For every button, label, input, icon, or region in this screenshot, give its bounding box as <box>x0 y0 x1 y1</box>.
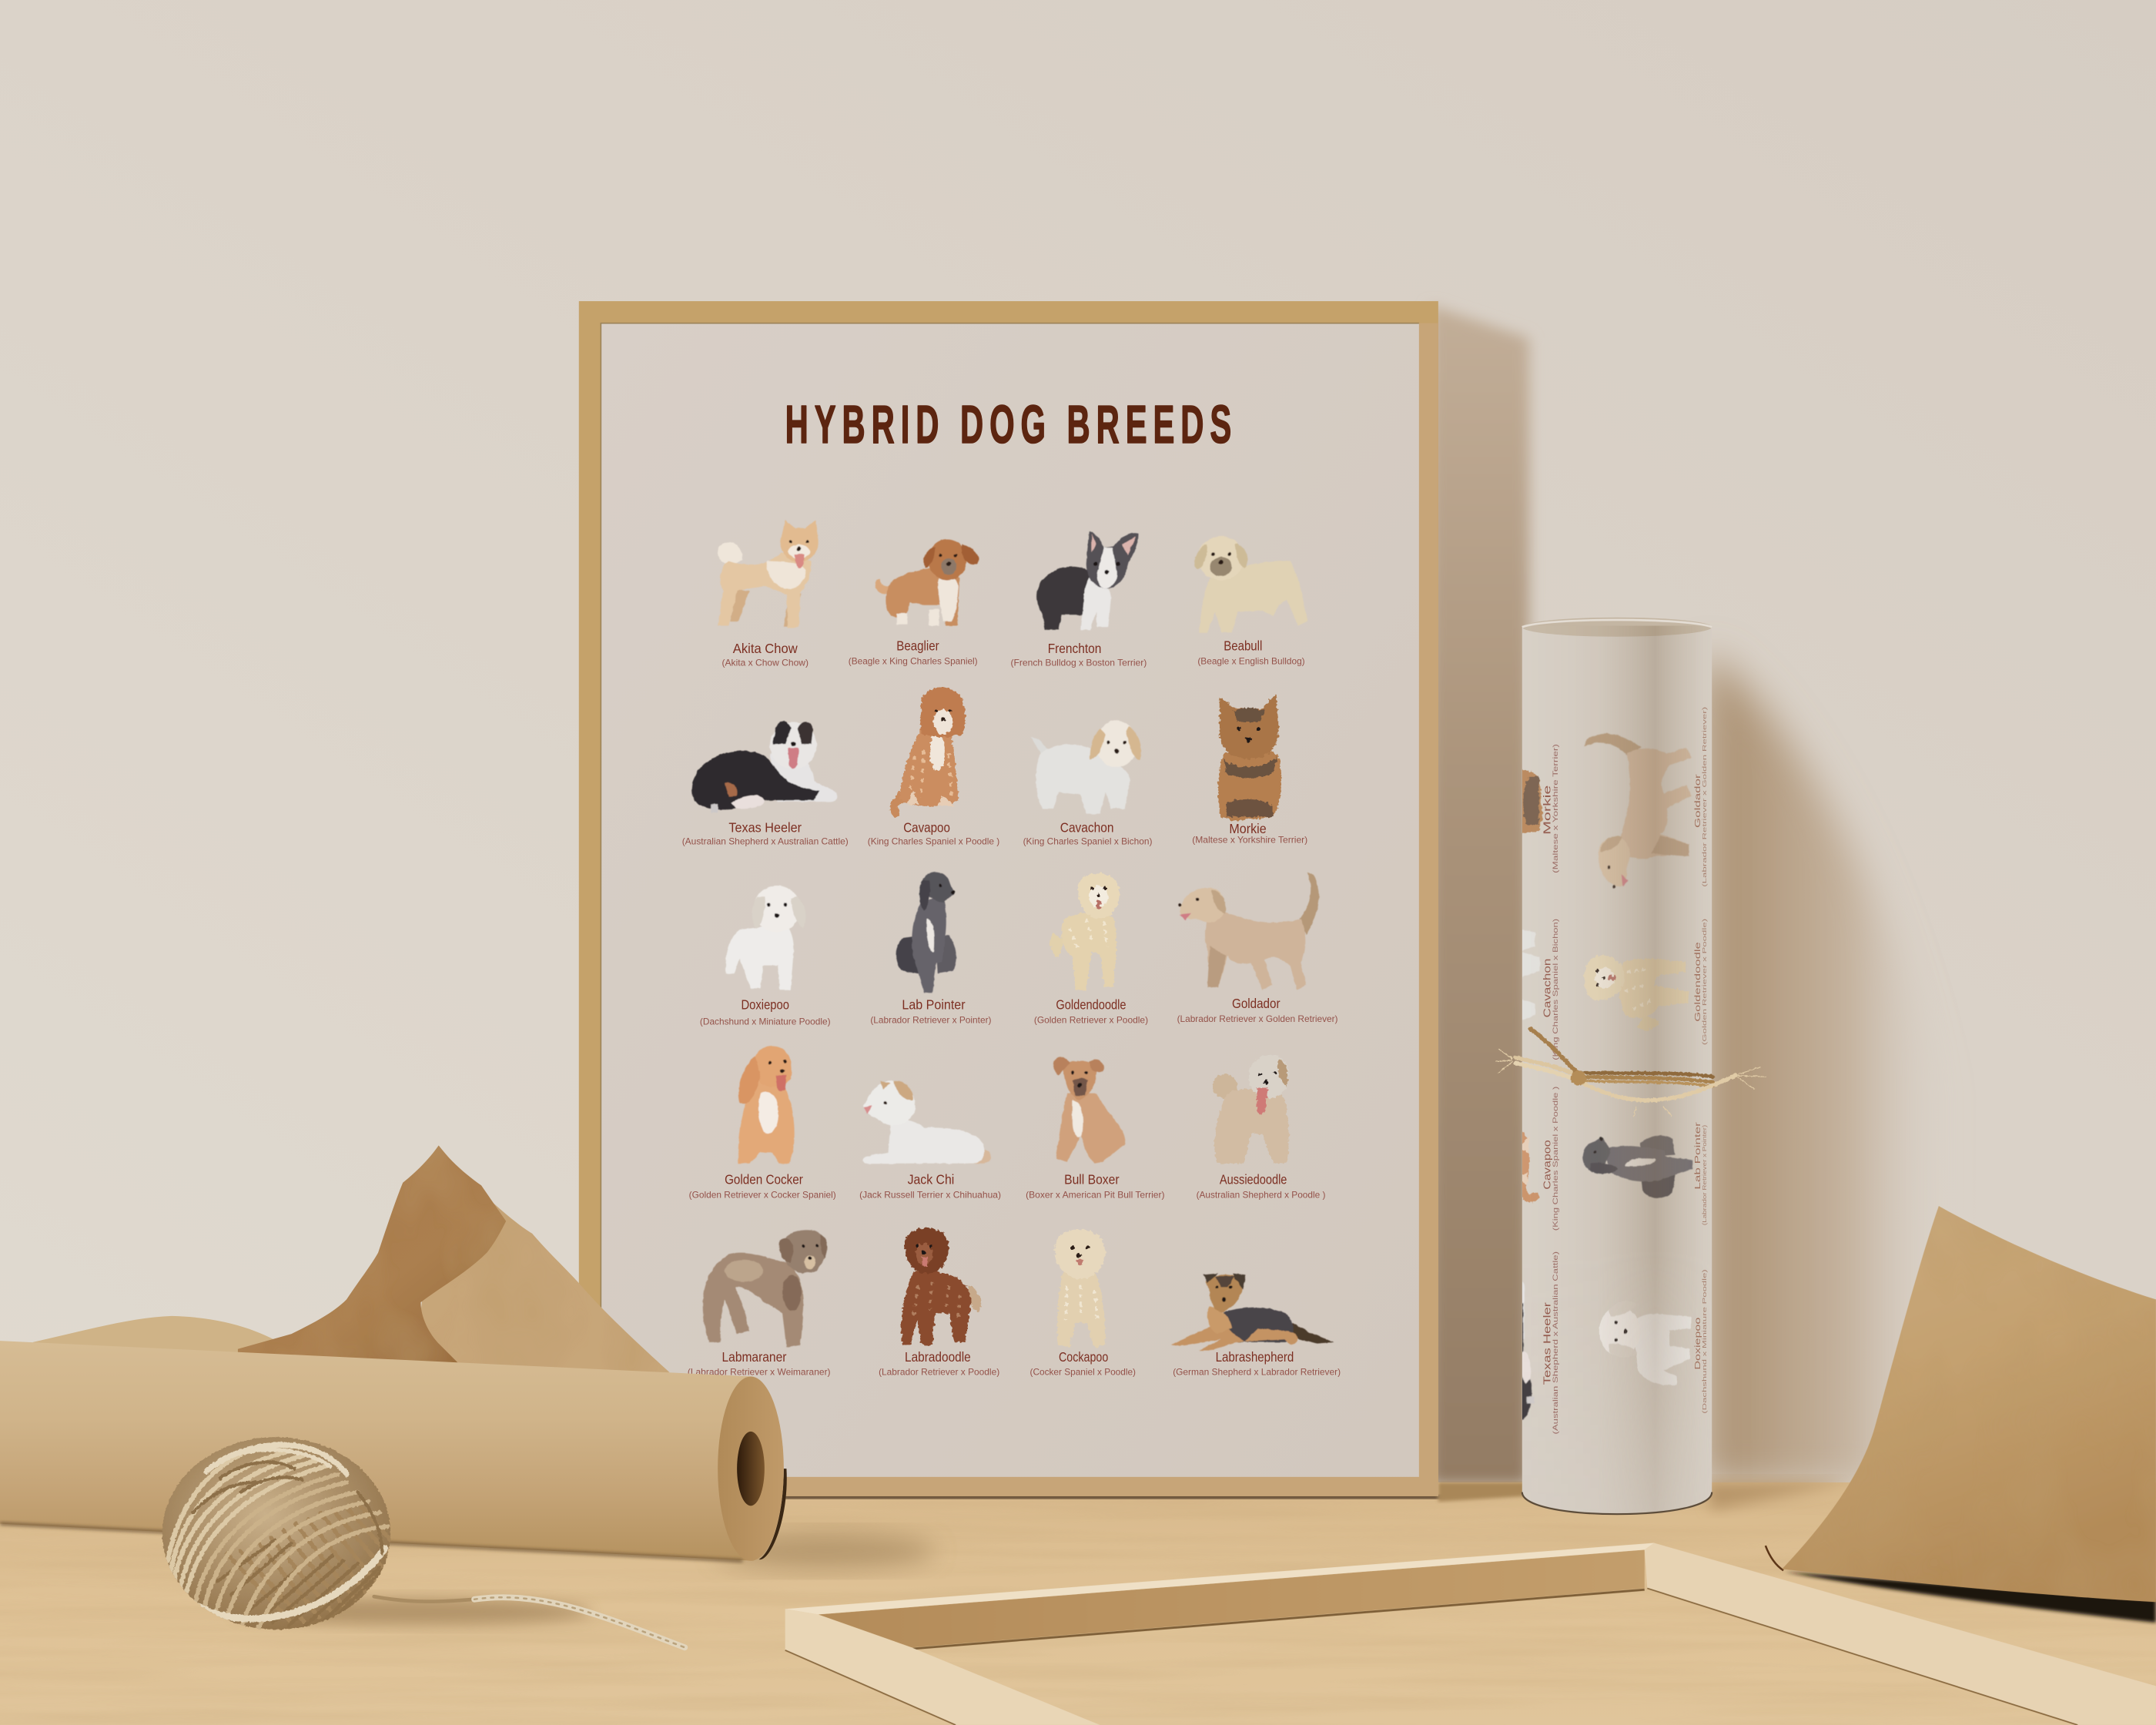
wall shadow of frame <box>1430 305 1529 1486</box>
cell: Goldendoodle <box>1034 873 1148 1026</box>
wall shadow of poster roll <box>1705 653 1946 1486</box>
paper light side <box>413 1146 670 1389</box>
cross: Labmaraner: (Labrador Retriever x Weimaraner) <box>688 1367 831 1378</box>
cell: Frenchton <box>1010 531 1147 668</box>
cross: Morkie: (Maltese x Yorkshire Terrier) <box>1192 835 1307 846</box>
frame left side <box>785 1609 1100 1725</box>
rolled labels: Lab Pointer <box>1694 1121 1702 1190</box>
dog: Labradoodle <box>901 1228 981 1345</box>
name: Golden Cocker: Golden Cocker <box>725 1171 803 1187</box>
cell: Beaglier <box>849 539 979 667</box>
name: Aussiedoodle: Aussiedoodle <box>1220 1171 1287 1187</box>
dog: Jack Chi <box>863 1080 991 1164</box>
cross: Goldendoodle: (Golden Retriever x Poodle) <box>1034 1015 1148 1026</box>
goldador rotated <box>1584 734 1692 889</box>
empty frame on table <box>785 1543 2156 1725</box>
dog: Texas Heeler <box>691 722 837 812</box>
cross: Frenchton: (French Bulldog x Boston Terrier) <box>1011 657 1147 668</box>
dog: Frenchton <box>1036 531 1139 630</box>
dog: Morkie <box>1218 695 1281 821</box>
paper inner edge <box>601 323 1419 1477</box>
cell: Labrashepherd <box>1171 1274 1341 1378</box>
cross: Labrashepherd: (German Shepherd x Labrador Retriever) <box>1173 1367 1341 1378</box>
name: Texas Heeler: Texas Heeler <box>728 819 802 835</box>
dog: Cockapoo <box>1055 1229 1106 1348</box>
kraft paper roll <box>0 1341 787 1561</box>
table shadows <box>234 1482 1850 1626</box>
frame inner face <box>818 1549 1645 1647</box>
name: Beaglier: Beaglier <box>896 638 939 654</box>
cell: Morkie <box>1192 695 1307 846</box>
cell: Jack Chi <box>859 1080 1001 1200</box>
twine around roll <box>1496 1029 1766 1117</box>
name: Labrashepherd: Labrashepherd <box>1216 1349 1294 1365</box>
title: HYBRID DOG BREEDS <box>785 395 1231 455</box>
cell: Labradoodle <box>879 1228 999 1378</box>
name: Bull Boxer: Bull Boxer <box>1064 1171 1120 1187</box>
paper dark side <box>238 1146 506 1364</box>
cell: Labmaraner <box>688 1230 831 1378</box>
cross: Doxiepoo: (Dachshund x Miniature Poodle) <box>700 1016 831 1027</box>
roll opening <box>1522 618 1712 637</box>
rolled labels: Cavapoo <box>1542 1140 1552 1190</box>
low paper mound <box>33 1316 289 1375</box>
dog: Beaglier <box>875 539 979 625</box>
cross: Jack Chi: (Jack Russell Terrier x Chihuahua) <box>859 1189 1001 1200</box>
cross: Golden Cocker: (Golden Retriever x Cocker Spaniel) <box>689 1189 836 1200</box>
dog: Cavachon <box>1031 721 1141 814</box>
rolled labels: (King Charles Spaniel x Bichon) <box>1552 919 1560 1060</box>
cross: Aussiedoodle: (Australian Shepherd x Poodle ) <box>1197 1189 1325 1200</box>
rolled labels: (Labrador Retriever x Golden Retriever) <box>1702 707 1708 887</box>
cell: Lab Pointer <box>870 872 992 1026</box>
dog: Doxiepoo <box>726 886 805 990</box>
cell: Aussiedoodle <box>1197 1055 1325 1200</box>
rolled labels: Doxiepoo <box>1694 1317 1702 1370</box>
name: Frenchton: Frenchton <box>1048 641 1101 656</box>
roll end dark crescent <box>759 1469 787 1559</box>
doxiepoo rotated <box>1599 1301 1692 1385</box>
cross: Lab Pointer: (Labrador Retriever x Pointer) <box>870 1015 991 1026</box>
cell: Texas Heeler <box>682 722 849 846</box>
cross: Labradoodle: (Labrador Retriever x Poodle) <box>879 1367 999 1378</box>
roll tube <box>1522 625 1712 1514</box>
cavapoo partial <box>1522 1131 1540 1204</box>
roll bottom edge <box>1522 1492 1712 1514</box>
rolled labels: Morkie <box>1542 785 1552 835</box>
rolled labels: (Maltese x Yorkshire Terrier) <box>1552 744 1560 873</box>
name: Goldador: Goldador <box>1232 996 1281 1011</box>
name: Cavachon: Cavachon <box>1060 819 1113 835</box>
roll rim <box>1522 620 1712 627</box>
cell: Golden Cocker <box>689 1046 836 1200</box>
dog: Cavapoo <box>889 688 966 817</box>
cell: Cockapoo <box>1030 1229 1136 1378</box>
dog: Aussiedoodle <box>1213 1055 1289 1164</box>
dog: Lab Pointer <box>896 872 956 993</box>
cross: Beabull: (Beagle x English Bulldog) <box>1197 655 1305 666</box>
cross: Texas Heeler: (Australian Shepherd x Australian Cattle) <box>682 836 849 846</box>
cell: Beabull <box>1194 536 1307 667</box>
cell: Goldador <box>1177 872 1338 1024</box>
rolled labels: (King Charles Spaniel x Poodle ) <box>1552 1087 1560 1231</box>
cross: Cavapoo: (King Charles Spaniel x Poodle ) <box>868 836 999 846</box>
name: Cavapoo: Cavapoo <box>903 819 950 835</box>
name: Cockapoo: Cockapoo <box>1059 1349 1108 1365</box>
paper shadow <box>1785 1572 2156 1623</box>
cell: Doxiepoo <box>700 886 831 1027</box>
dog: Labrashepherd <box>1171 1274 1334 1351</box>
goldendoodle rotated <box>1584 956 1689 1030</box>
dog: Labmaraner <box>703 1230 827 1348</box>
rolled labels: Goldendoodle <box>1694 941 1702 1022</box>
paper curled edge <box>1766 1546 1783 1570</box>
morkie partial <box>1522 769 1543 833</box>
rolled labels: (Australian Shepherd x Australian Cattle) <box>1552 1251 1560 1434</box>
dog: Bull Boxer <box>1053 1057 1125 1164</box>
poster paper <box>601 323 1419 1477</box>
roll underside shadow <box>0 1524 742 1561</box>
cavachon partial <box>1522 929 1540 1020</box>
roll end cap <box>718 1377 784 1561</box>
name: Jack Chi: Jack Chi <box>908 1171 954 1187</box>
wooden frame <box>579 301 1438 1496</box>
name: Beabull: Beabull <box>1224 638 1262 654</box>
rolled labels: Cavachon <box>1542 959 1552 1017</box>
rolled labels: Goldador <box>1694 773 1702 828</box>
texas heeler partial <box>1522 1281 1533 1420</box>
frame inner shadow <box>912 1589 1645 1649</box>
name: Labmaraner: Labmaraner <box>722 1349 786 1365</box>
frame right and bottom tone <box>579 323 1438 1496</box>
frame back rim <box>785 1543 1654 1614</box>
dog: Golden Cocker <box>738 1046 795 1164</box>
loose twine end <box>374 1596 685 1647</box>
cross: Bull Boxer: (Boxer x American Pit Bull Terrier) <box>1026 1189 1165 1200</box>
name: Labradoodle: Labradoodle <box>905 1349 971 1365</box>
name: Morkie: Morkie <box>1229 821 1267 836</box>
dog: Beabull <box>1194 536 1307 632</box>
rolled labels <box>1542 707 1708 1434</box>
dog: Goldador <box>1178 872 1319 990</box>
roll body <box>0 1341 754 1561</box>
cell: Bull Boxer <box>1026 1057 1164 1200</box>
frame right side <box>1645 1543 2156 1725</box>
cross: Akita Chow: (Akita x Chow Chow) <box>722 657 808 668</box>
roll shading <box>1522 625 1712 1514</box>
cell: Cavapoo <box>868 688 999 846</box>
paper sheet <box>1782 1206 2156 1602</box>
name: Lab Pointer: Lab Pointer <box>902 997 966 1013</box>
roll core hole <box>737 1432 765 1506</box>
name: Akita Chow: Akita Chow <box>733 641 798 656</box>
cross: Cockapoo: (Cocker Spaniel x Poodle) <box>1030 1367 1136 1378</box>
rolled labels: Texas Heeler <box>1542 1302 1552 1385</box>
kraft paper, right <box>1766 1206 2156 1623</box>
rolled labels: (Dachshund x Miniature Poodle) <box>1702 1269 1708 1414</box>
cross: Beaglier: (Beagle x King Charles Spaniel) <box>849 655 978 666</box>
dog: Akita Chow <box>718 520 819 628</box>
rolled poster <box>1422 618 1712 1514</box>
wooden table <box>0 1482 2156 1725</box>
cross: Cavachon: (King Charles Spaniel x Bichon) <box>1023 836 1152 846</box>
rolled poster art <box>1522 707 1708 1434</box>
dog: Goldendoodle <box>1050 873 1120 990</box>
crumpled kraft paper <box>33 1146 670 1389</box>
rolled labels: (Golden Retriever x Poodle) <box>1702 919 1708 1045</box>
cross: Goldador: (Labrador Retriever x Golden Retriever) <box>1177 1013 1338 1024</box>
lab pointer rotated <box>1582 1136 1692 1198</box>
name: Doxiepoo: Doxiepoo <box>742 997 789 1013</box>
cell: Akita Chow <box>718 520 819 668</box>
rolled labels: (Labrador Retriever x Pointer) <box>1702 1125 1708 1225</box>
cell: Cavachon <box>1023 721 1152 846</box>
name: Goldendoodle: Goldendoodle <box>1056 997 1127 1013</box>
table wood grain <box>0 1482 2156 1725</box>
framed poster <box>579 301 1438 1496</box>
ball of twine <box>162 1437 393 1630</box>
